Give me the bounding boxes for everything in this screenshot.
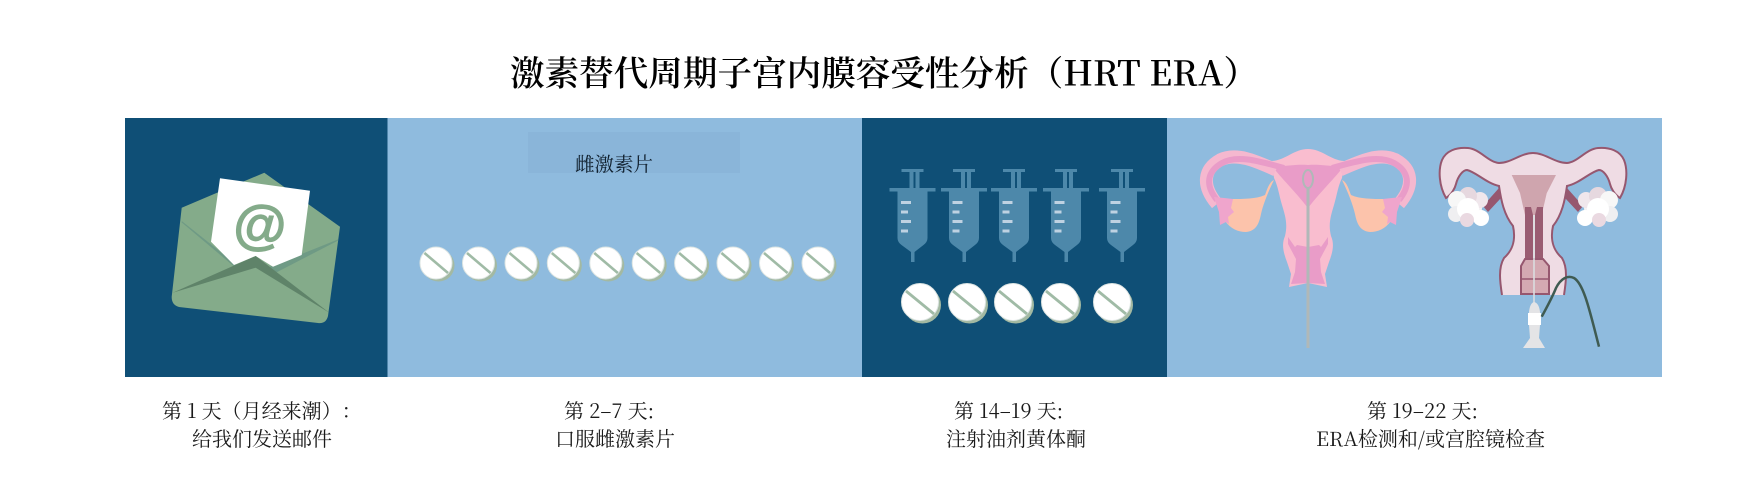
caption: day 14-19: 注射油剂黄体酮	[946, 423, 1086, 452]
illustration: uterus with catheter	[1206, 149, 1410, 348]
catheter	[1303, 170, 1313, 348]
caption: day 14-19: 第 14–19 天:	[954, 395, 1063, 424]
caption: day 2-7: 第 2–7 天:	[564, 395, 654, 424]
email sheet	[211, 178, 310, 267]
cervix	[1521, 259, 1549, 294]
cervical canal	[1525, 207, 1543, 259]
estrogen pills row	[420, 247, 836, 282]
cervix line	[1521, 278, 1549, 280]
caption: day 2-7: 口服雌激素片	[555, 423, 675, 452]
panel: day 14-19 background	[862, 118, 1167, 377]
label: estrogen tablets	[528, 132, 740, 177]
caption: day 1: 第 1 天（月经来潮）：	[162, 395, 362, 424]
panel: day 19-22 background	[1167, 118, 1662, 377]
uterine cavity	[1512, 175, 1556, 215]
panel: day 2-7 background	[388, 118, 862, 377]
ultrasound probe	[1523, 215, 1599, 348]
title: 激素替代周期子宫内膜容受性分析（HRT ERA）	[510, 46, 1258, 96]
envelope fold	[173, 256, 329, 313]
caption: day 14-19	[946, 395, 1086, 452]
caption: day 1: 给我们发送邮件	[192, 423, 332, 452]
caption: day 2-7	[555, 395, 675, 452]
caption: day 19-22: ERA检测和/或宫腔镜检查	[1316, 423, 1545, 452]
caption: day 1	[162, 395, 362, 452]
label: estrogen tablets: 雌激素片	[575, 149, 653, 177]
caption: day 19-22: 第 19–22 天:	[1367, 395, 1478, 424]
panel: day 1 background	[125, 118, 388, 377]
icon: open envelope with email sign	[172, 173, 340, 323]
illustration: uterus with ultrasound probe	[1440, 148, 1626, 348]
at sign: @	[232, 194, 288, 256]
caption: day 19-22	[1316, 395, 1545, 452]
syringes row	[890, 169, 1145, 262]
progesterone pills row	[902, 284, 1133, 324]
